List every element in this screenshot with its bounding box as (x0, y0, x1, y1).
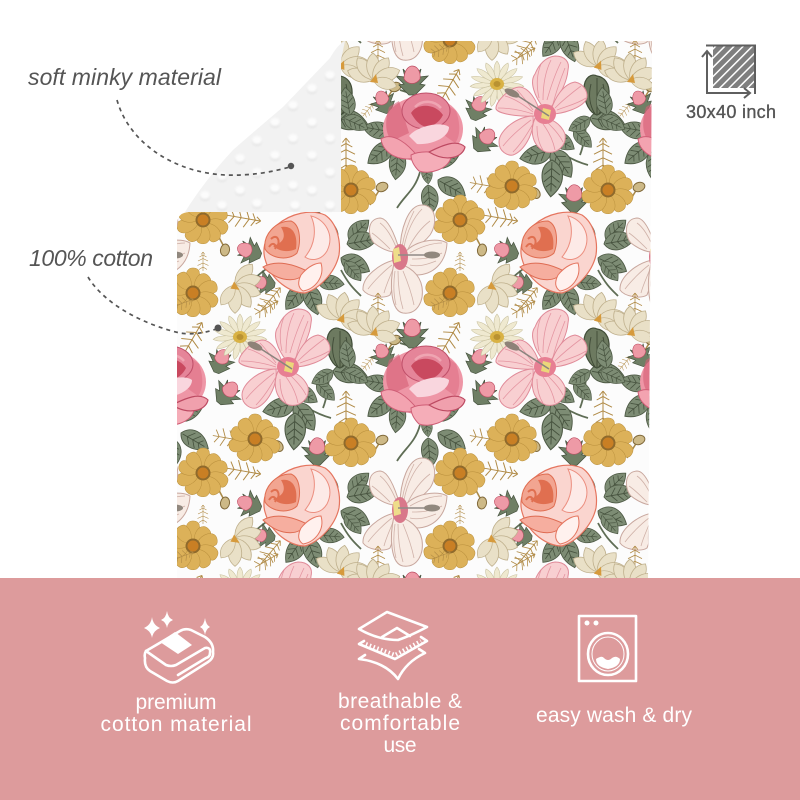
feature: breathable and comfortable use: breathable & (338, 690, 462, 713)
feature: easy wash and dry (536, 616, 692, 727)
blanket floral pattern (177, 41, 652, 578)
size icon and label: 30x40 inch (686, 102, 776, 122)
feature: premium cotton material: premium (136, 691, 216, 714)
icon: folded towel with sparkles (144, 611, 213, 682)
feature: easy wash and dry: easy wash & dry (536, 704, 692, 727)
callout: 100% cotton (29, 245, 222, 334)
pink feature band (0, 578, 800, 800)
feature: breathable and comfortable use: use (384, 734, 416, 757)
icon: layered fabric sheets (359, 612, 427, 679)
callout: soft minky material (28, 64, 294, 175)
feature: premium cotton material (100, 611, 252, 736)
icon: washing machine (579, 616, 636, 681)
feature: premium cotton material: cotton material (100, 713, 252, 736)
feature: breathable and comfortable use: comfortable (340, 712, 460, 735)
callout: 100% cotton: 100% cotton (29, 245, 153, 271)
callout: soft minky material: soft minky material (28, 64, 222, 90)
size icon and label (686, 45, 776, 122)
feature: breathable and comfortable use (338, 612, 462, 757)
folded minky corner (185, 41, 345, 212)
